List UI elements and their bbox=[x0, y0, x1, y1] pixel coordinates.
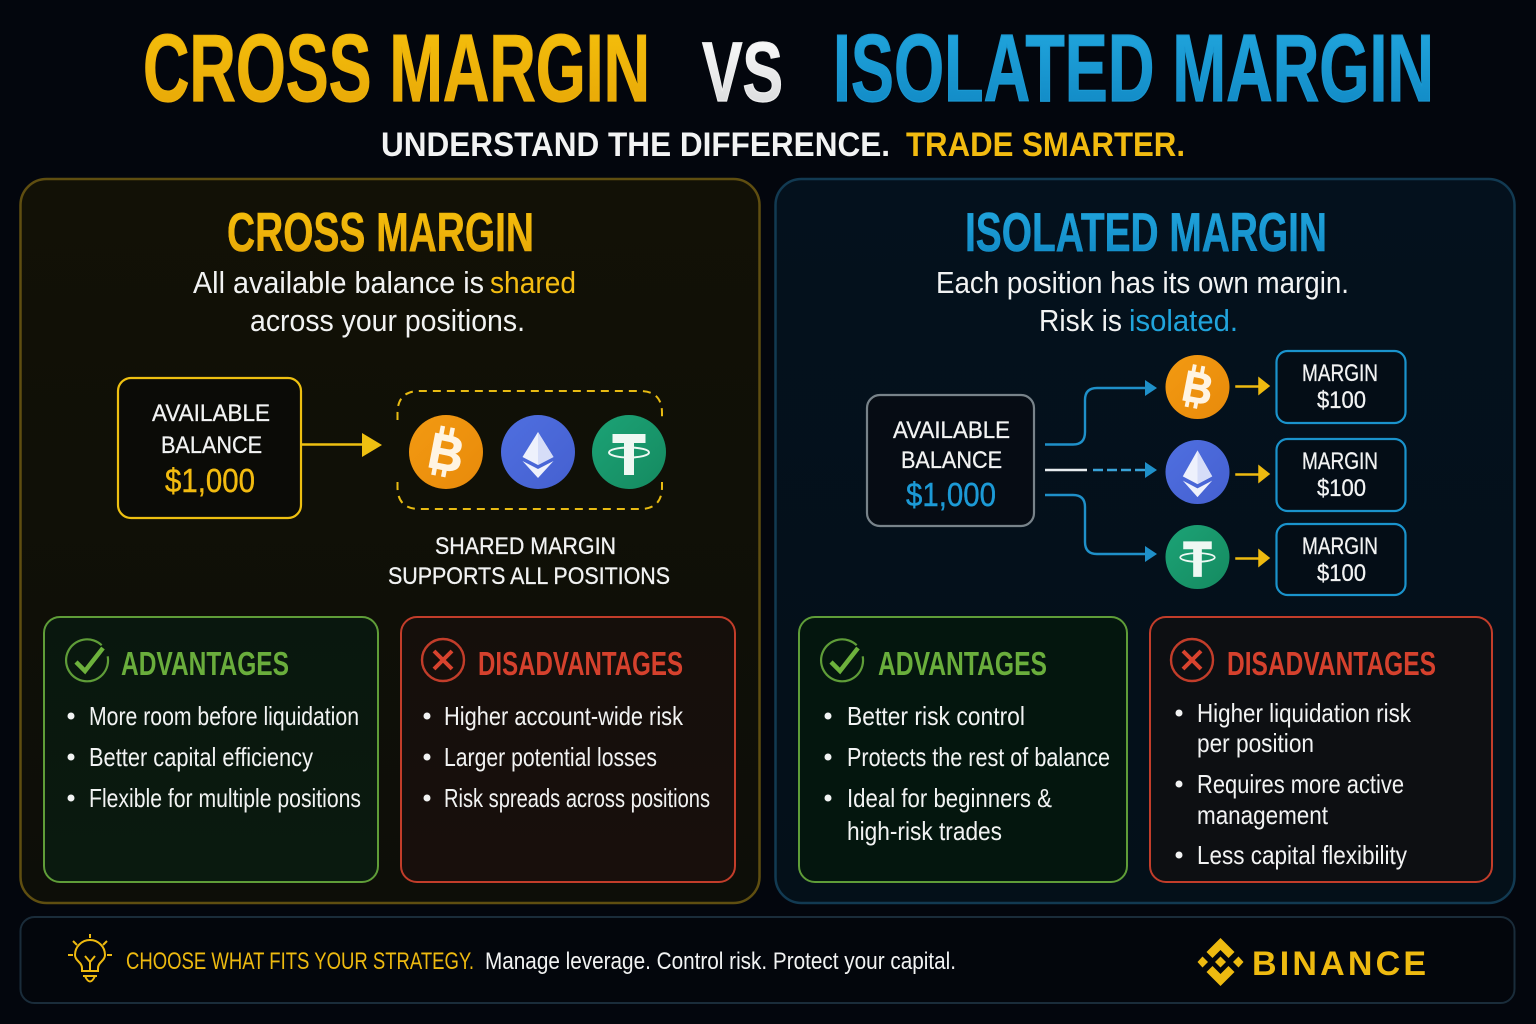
icon: ethereum bbox=[501, 415, 575, 489]
icon: lightbulb bbox=[68, 934, 112, 982]
icon: cross bbox=[422, 639, 464, 681]
advantages box bbox=[799, 617, 1127, 882]
disadvantages list: Larger potential losses bbox=[444, 742, 657, 772]
advantages list: Protects the rest of balance bbox=[847, 742, 1110, 772]
caption: shared margin: SUPPORTS ALL POSITIONS bbox=[388, 563, 670, 590]
footer message bbox=[126, 948, 956, 975]
disadvantages list: management bbox=[1197, 800, 1329, 830]
arrow: balance to ethereum bbox=[1045, 462, 1157, 478]
disadvantages list: Less capital flexibility bbox=[1197, 840, 1407, 870]
margin box: tether bbox=[1276, 524, 1406, 595]
heading: disadvantages: DISADVANTAGES bbox=[478, 645, 683, 682]
available balance box bbox=[118, 378, 301, 518]
margin box: bitcoin: MARGIN bbox=[1302, 360, 1378, 387]
margin box: tether: MARGIN bbox=[1302, 533, 1378, 560]
heading: cross margin: CROSS MARGIN bbox=[227, 201, 534, 263]
logo: binance: BINANCE bbox=[1252, 945, 1426, 983]
icon: check bbox=[63, 636, 111, 685]
caption: shared margin bbox=[388, 533, 670, 590]
icon: check bbox=[818, 636, 866, 685]
advantages list: More room before liquidation bbox=[89, 701, 359, 731]
description: cross margin bbox=[193, 265, 576, 338]
panel: cross margin bbox=[20, 179, 760, 903]
description: isolated margin: isolated. bbox=[1129, 303, 1238, 338]
advantages box bbox=[44, 617, 378, 882]
available balance box: BALANCE bbox=[901, 447, 1002, 474]
footer message: CHOOSE WHAT FITS YOUR STRATEGY. bbox=[126, 948, 474, 975]
disadvantages box bbox=[401, 617, 735, 882]
margin box: tether: $100 bbox=[1317, 560, 1366, 587]
disadvantages list bbox=[1176, 698, 1412, 870]
icon: tether bbox=[592, 415, 666, 489]
description: cross margin: across your positions. bbox=[250, 303, 525, 338]
description: isolated margin: Each position has its own margin. bbox=[936, 265, 1349, 300]
available balance box: $1,000 bbox=[165, 462, 255, 499]
margin box: ethereum: $100 bbox=[1317, 475, 1366, 502]
margin box: ethereum: MARGIN bbox=[1302, 448, 1378, 475]
margin box: ethereum bbox=[1276, 439, 1406, 511]
advantages list: high-risk trades bbox=[847, 816, 1002, 846]
advantages list: Better risk control bbox=[847, 701, 1025, 731]
shared margin dashed outline bbox=[398, 391, 662, 509]
subtitle: UNDERSTAND THE DIFFERENCE. bbox=[381, 126, 890, 164]
logo: binance bbox=[1198, 938, 1426, 986]
description: isolated margin: Risk is bbox=[1039, 303, 1122, 338]
margin box: bitcoin: $100 bbox=[1317, 387, 1366, 414]
available balance box bbox=[867, 395, 1034, 526]
heading: disadvantages: DISADVANTAGES bbox=[1227, 645, 1436, 682]
description: cross margin: shared bbox=[490, 265, 576, 300]
available balance box: AVAILABLE bbox=[893, 417, 1010, 444]
subtitle: TRADE SMARTER. bbox=[906, 126, 1185, 164]
footer bar bbox=[20, 917, 1514, 1003]
description: cross margin: All available balance is bbox=[193, 265, 484, 300]
title bbox=[143, 15, 1434, 122]
disadvantages box bbox=[1150, 617, 1492, 882]
title: VS bbox=[702, 25, 783, 119]
disadvantages list: Requires more active bbox=[1197, 769, 1404, 799]
arrow: balance to bitcoin bbox=[1045, 380, 1157, 444]
advantages list bbox=[824, 701, 1110, 846]
icon: bitcoin: B bbox=[1178, 362, 1217, 415]
arrow: balance to tether bbox=[1045, 495, 1157, 562]
icon: bitcoin bbox=[409, 415, 483, 489]
disadvantages list bbox=[424, 701, 710, 813]
description: isolated margin bbox=[936, 265, 1349, 338]
caption: shared margin: SHARED MARGIN bbox=[435, 533, 616, 560]
advantages list: Flexible for multiple positions bbox=[89, 783, 361, 813]
icon: bitcoin bbox=[1165, 355, 1230, 419]
disadvantages list: per position bbox=[1197, 728, 1314, 758]
advantages list: Ideal for beginners & bbox=[847, 783, 1052, 813]
heading: advantages: ADVANTAGES bbox=[878, 645, 1047, 682]
available balance box: AVAILABLE bbox=[152, 400, 270, 427]
heading: isolated margin: ISOLATED MARGIN bbox=[965, 201, 1327, 263]
arrow: ethereum to margin bbox=[1236, 466, 1269, 482]
available balance box: BALANCE bbox=[161, 432, 262, 459]
icon: ethereum bbox=[1165, 440, 1230, 504]
title: CROSS MARGIN bbox=[143, 15, 650, 122]
arrow: tether to margin bbox=[1236, 550, 1269, 566]
icon: cross bbox=[1171, 639, 1213, 681]
footer message: Manage leverage. Control risk. Protect your capital. bbox=[485, 948, 956, 975]
arrow: bitcoin to margin bbox=[1236, 378, 1269, 394]
advantages list: Better capital efficiency bbox=[89, 742, 313, 772]
arrow: balance to shared margin bbox=[301, 433, 382, 457]
disadvantages list: Higher account-wide risk bbox=[444, 701, 684, 731]
icon: bitcoin: B bbox=[424, 422, 469, 484]
icon: tether bbox=[1165, 525, 1230, 589]
available balance box: $1,000 bbox=[906, 476, 996, 513]
disadvantages list: Higher liquidation risk bbox=[1197, 698, 1412, 728]
margin box: bitcoin bbox=[1276, 351, 1406, 423]
heading: advantages: ADVANTAGES bbox=[121, 645, 289, 682]
advantages list bbox=[68, 701, 361, 813]
panel: isolated margin bbox=[776, 179, 1514, 903]
disadvantages list: Risk spreads across positions bbox=[444, 783, 710, 813]
subtitle bbox=[381, 126, 1185, 164]
